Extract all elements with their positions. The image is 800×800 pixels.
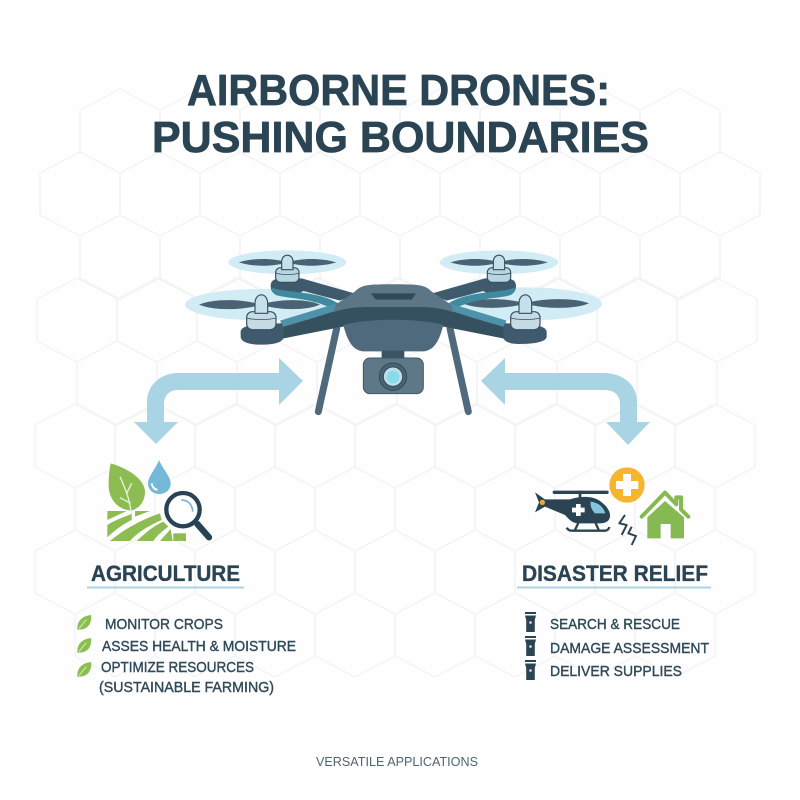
leaf (109, 463, 145, 511)
camera (363, 358, 423, 394)
title: AIRBORNE DRONES: (187, 66, 610, 115)
underline: agriculture (87, 586, 244, 588)
underline: disaster relief (517, 586, 711, 588)
motors (247, 255, 540, 330)
medical cross (609, 467, 645, 503)
footer caption: VERSATILE APPLICATIONS (316, 754, 478, 769)
title: PUSHING BOUNDARIES (152, 113, 649, 162)
list: agriculture: OPTIMIZE RESOURCES (101, 659, 254, 676)
propeller blades (199, 259, 589, 309)
title (152, 66, 649, 162)
wing highlights (280, 303, 507, 327)
dark band (283, 307, 503, 338)
house (642, 493, 688, 538)
rotor discs (185, 250, 602, 321)
icon: agriculture (leaf, drop, field, magnifier) (107, 460, 209, 541)
list: agriculture: MONITOR CROPS (105, 616, 223, 633)
heading: agriculture: AGRICULTURE (91, 561, 240, 586)
cracks (619, 515, 636, 545)
list: disaster relief (525, 612, 709, 680)
arrow: drone to disaster relief (481, 358, 650, 445)
main body (241, 284, 547, 345)
drone illustration (185, 250, 602, 412)
bullet flashlights (525, 612, 536, 680)
list: agriculture (77, 615, 296, 696)
gimbal (382, 351, 404, 359)
field (107, 511, 186, 541)
rear arms (271, 278, 516, 309)
landing legs (318, 328, 468, 412)
water drop (148, 460, 171, 494)
bullet leaves (77, 615, 91, 677)
arrow: agriculture to drone (134, 358, 303, 444)
list: agriculture: ASSES HEALTH & MOISTURE (102, 638, 296, 655)
top plate (333, 284, 453, 312)
list: agriculture: (SUSTAINABLE FARMING) (99, 679, 274, 696)
list: disaster relief: DAMAGE ASSESSMENT (550, 640, 709, 657)
body vent (371, 293, 416, 300)
helicopter (535, 491, 610, 531)
magnifier (166, 493, 209, 537)
list: disaster relief: SEARCH & RESCUE (550, 616, 680, 633)
belly (343, 320, 443, 351)
leaf veins (120, 477, 132, 518)
icon: disaster relief (helicopter, medical cross, cracks, house) (535, 467, 688, 545)
heading: disaster relief: DISASTER RELIEF (522, 561, 708, 586)
list: disaster relief: DELIVER SUPPLIES (550, 663, 682, 680)
